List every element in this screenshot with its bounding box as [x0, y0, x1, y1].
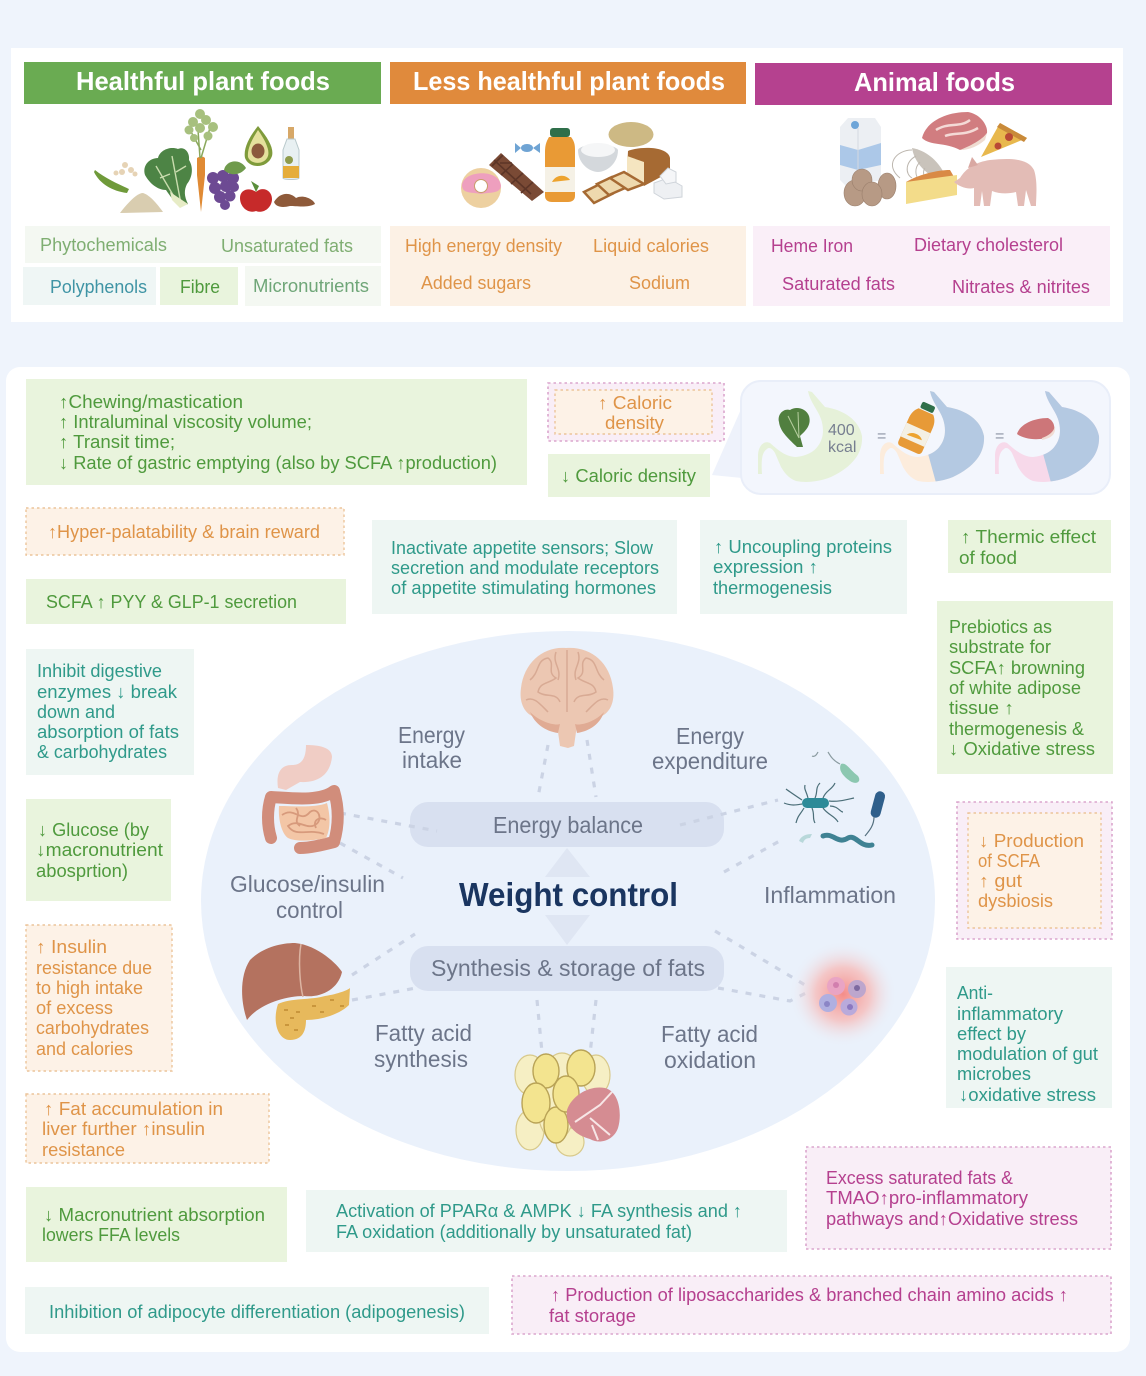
- callout: macronutrient absorption: [26, 1187, 287, 1262]
- icon: brain: [521, 648, 613, 748]
- pill: synthesis and storage of fats: Synthesis & storage of fats: [431, 955, 705, 981]
- callout: prebiotics: of white adipose: [949, 678, 1081, 698]
- text: 400 kcal: 400: [828, 422, 855, 439]
- callout: insulin resistance: to high intake: [36, 978, 143, 998]
- callout: digestive enzymes: [26, 649, 194, 775]
- callout: uncoupling proteins: [700, 520, 907, 614]
- panel: mechanisms background: [6, 367, 1130, 1352]
- label: fatty acid oxidation: Fatty acid: [661, 1021, 758, 1047]
- callout: digestive enzymes: Inhibit digestive: [37, 661, 162, 681]
- panel: food groups: [11, 48, 1123, 322]
- callout: insulin resistance: carbohydrates: [36, 1018, 149, 1038]
- text: equals sign: =: [877, 428, 886, 445]
- callout: SCFA production and gut dysbiosis: ↑ gut: [979, 871, 1022, 891]
- callout: decreased caloric density: ↓ Caloric density: [561, 466, 696, 486]
- callout: glucose: ↓ Glucose (by: [38, 820, 149, 840]
- callout: liposaccharides: ↑ Production of liposaccharides & branched chain amino acids ↑: [551, 1285, 1068, 1305]
- callout: glucose: ↓macronutrient: [36, 840, 163, 860]
- callout: fat accumulation in liver: liver further ↑insulin: [42, 1119, 205, 1139]
- icon: stomach and intestines: [268, 745, 338, 848]
- callout: appetite sensors: secretion and modulate receptors: [391, 558, 659, 578]
- callout: appetite sensors: Inactivate appetite sensors; Slow: [391, 538, 654, 558]
- icon: adipose tissue: [515, 1050, 620, 1156]
- callout: glucose: abosprtion): [36, 861, 128, 881]
- label: energy intake: [398, 722, 465, 773]
- callout: SCFA production and gut dysbiosis: of SCFA: [978, 851, 1040, 871]
- text: 400 kcal: kcal: [828, 439, 856, 456]
- label: energy expenditure: expenditure: [652, 748, 768, 774]
- callout: anti-inflammatory: Anti-: [957, 983, 993, 1003]
- panel: less healthful nutrients: [390, 226, 746, 306]
- callout: prebiotics: substrate for: [949, 637, 1051, 657]
- heading: Animal foods: Animal foods: [854, 67, 1015, 97]
- callout: appetite sensors: of appetite stimulating hormones: [391, 578, 656, 598]
- callout: thermic effect: of food: [959, 548, 1017, 568]
- heading: Less healthful plant foods: [390, 62, 746, 104]
- panel: less healthful nutrients: Added sugars: [421, 273, 531, 293]
- panel: healthful nutrients: Phytochemicals: [40, 235, 167, 255]
- panel: animal nutrients: Dietary cholesterol: [914, 235, 1063, 255]
- label: fatty acid oxidation: oxidation: [664, 1047, 756, 1073]
- callout: hyper-palatability: ↑Hyper-palatability & brain reward: [48, 522, 320, 542]
- callout: saturated fats and TMAO: pathways and↑Oxidative stress: [826, 1209, 1078, 1229]
- callout: anti-inflammatory: [946, 967, 1112, 1108]
- central diagram: weight control: [201, 631, 935, 1171]
- icon: gut bacteria: [784, 752, 886, 845]
- label: energy expenditure: Energy: [676, 723, 744, 749]
- callout: digestive enzymes: absorption of fats: [37, 722, 179, 742]
- text: equals sign: =: [995, 428, 1004, 445]
- callout: saturated fats and TMAO: [806, 1147, 1111, 1249]
- panel: healthful nutrients: Polyphenols: [50, 277, 147, 297]
- label: energy intake: intake: [402, 747, 462, 773]
- callout: thermic effect: [948, 520, 1111, 573]
- callout: fat accumulation in liver: resistance: [42, 1140, 125, 1160]
- label: fatty acid synthesis: [374, 1020, 472, 1072]
- callout: anti-inflammatory: effect by: [957, 1024, 1026, 1044]
- panel: healthful nutrients: Unsaturated fats: [221, 236, 353, 256]
- label: energy intake: Energy: [398, 722, 465, 748]
- callout: chewing, viscosity, transit time, gastric emptying: ↑Chewing/mastication: [59, 392, 243, 412]
- callout: prebiotics: Prebiotics as: [949, 617, 1052, 637]
- callout: digestive enzymes: down and: [37, 702, 115, 722]
- icon: animal foods illustration: [840, 112, 1036, 206]
- callout: SCFA secretion: SCFA ↑ PYY & GLP-1 secretion: [46, 592, 297, 612]
- label: glucose/insulin control: Glucose/insulin: [230, 871, 385, 897]
- callout: insulin resistance: and calories: [36, 1039, 133, 1059]
- callout: prebiotics: tissue ↑: [949, 698, 1014, 718]
- callout: anti-inflammatory: microbes: [957, 1064, 1031, 1084]
- callout: chewing, viscosity, transit time, gastric emptying: [26, 379, 527, 485]
- panel: animal nutrients: Heme Iron: [771, 236, 853, 256]
- callout: digestive enzymes: enzymes ↓ break: [37, 682, 178, 702]
- callout: chewing, viscosity, transit time, gastric emptying: ↓ Rate of gastric emptying (also by SCFA ↑production): [59, 453, 497, 473]
- callout: fat accumulation in liver: ↑ Fat accumulation in: [44, 1099, 223, 1119]
- panel: less healthful nutrients: Liquid calories: [593, 236, 709, 256]
- callout: SCFA secretion: [26, 579, 346, 624]
- callout: saturated fats and TMAO: Excess saturated fats &: [826, 1168, 1013, 1188]
- icon: liver and pancreas: [242, 943, 350, 1040]
- panel: equal calories, stomach comparison: [712, 381, 1110, 494]
- callout: PPAR and AMPK activation: [306, 1190, 787, 1252]
- callout: insulin resistance: [26, 925, 172, 1071]
- callout: thermic effect: ↑ Thermic effect: [961, 527, 1096, 547]
- callout: insulin resistance: of excess: [36, 998, 113, 1018]
- callout: SCFA production and gut dysbiosis: ↓ Production: [979, 831, 1084, 851]
- callout: macronutrient absorption: ↓ Macronutrient absorption: [44, 1205, 265, 1225]
- callout: prebiotics: SCFA↑ browning: [949, 658, 1085, 678]
- callout: anti-inflammatory: ↓oxidative stress: [959, 1085, 1096, 1105]
- panel: animal nutrients: [753, 226, 1110, 306]
- label: fatty acid synthesis: synthesis: [374, 1046, 468, 1072]
- callout: insulin resistance: resistance due: [36, 958, 152, 978]
- callout: SCFA production and gut dysbiosis: [957, 802, 1112, 939]
- label: glucose/insulin control: [230, 871, 385, 923]
- icon: less healthful plant foods illustration: [461, 122, 682, 208]
- callout: fat accumulation in liver: [26, 1094, 269, 1163]
- arrow: down triangle: [545, 915, 590, 945]
- callout: hyper-palatability: [26, 508, 344, 555]
- panel: healthful nutrients: [23, 226, 381, 306]
- callout: prebiotics: [937, 601, 1113, 774]
- callout: decreased caloric density: [548, 454, 710, 497]
- callout: SCFA production and gut dysbiosis: dysbiosis: [978, 891, 1053, 911]
- callout: digestive enzymes: & carbohydrates: [37, 742, 167, 762]
- icon: inflammation cells: [789, 941, 897, 1047]
- heading: Healthful plant foods: Healthful plant foods: [76, 66, 330, 96]
- callout: adipogenesis: [25, 1287, 489, 1334]
- icon: healthful plant foods illustration: [94, 109, 315, 213]
- title: weight control: Weight control: [459, 876, 678, 913]
- callout: liposaccharides: fat storage: [549, 1306, 636, 1326]
- heading: Healthful plant foods: [24, 62, 381, 104]
- heading: Less healthful plant foods: Less healthful plant foods: [413, 66, 725, 96]
- callout: increased caloric density: density: [605, 413, 664, 433]
- callout: insulin resistance: ↑ Insulin: [36, 937, 107, 957]
- callout: uncoupling proteins: thermogenesis: [713, 578, 832, 598]
- callout: chewing, viscosity, transit time, gastric emptying: ↑ Transit time;: [59, 432, 175, 452]
- callout: anti-inflammatory: inflammatory: [957, 1004, 1063, 1024]
- callout: chewing, viscosity, transit time, gastric emptying: ↑ Intraluminal viscosity volume;: [59, 412, 312, 432]
- callout: macronutrient absorption: lowers FFA levels: [42, 1225, 180, 1245]
- callout: PPAR and AMPK activation: Activation of PPARα & AMPK ↓ FA synthesis and ↑: [336, 1201, 742, 1221]
- callout: PPAR and AMPK activation: FA oxidation (additionally by unsaturated fat): [336, 1222, 692, 1242]
- icon: stomach with juice: [880, 391, 984, 482]
- callout: glucose: [26, 799, 171, 901]
- callout: increased caloric density: [548, 383, 724, 441]
- pill: synthesis and storage of fats: [410, 946, 724, 991]
- panel: less healthful nutrients: Sodium: [629, 273, 690, 293]
- callout: prebiotics: thermogenesis &: [949, 719, 1084, 739]
- callout: anti-inflammatory: modulation of gut: [957, 1044, 1098, 1064]
- callout: uncoupling proteins: expression ↑: [713, 557, 818, 577]
- label: fatty acid synthesis: Fatty acid: [375, 1020, 472, 1046]
- label: glucose/insulin control: control: [276, 897, 343, 923]
- callout: saturated fats and TMAO: TMAO↑pro-inflammatory: [826, 1188, 1028, 1208]
- arrow: up triangle: [545, 848, 590, 877]
- panel: healthful nutrients: Fibre: [180, 277, 220, 297]
- icon: stomach with meat: [995, 391, 1099, 482]
- icon: stomach with vegetables: [758, 391, 862, 482]
- label: energy expenditure: [652, 723, 768, 774]
- callout: adipogenesis: Inhibition of adipocyte differentiation (adipogenesis): [49, 1302, 465, 1322]
- callout: increased caloric density: ↑ Caloric: [598, 393, 672, 413]
- callout: prebiotics: ↓ Oxidative stress: [949, 739, 1095, 759]
- panel: animal nutrients: Saturated fats: [782, 274, 895, 294]
- callout: uncoupling proteins: ↑ Uncoupling proteins: [714, 537, 892, 557]
- panel: healthful nutrients: Micronutrients: [253, 276, 369, 296]
- label: fatty acid oxidation: [661, 1021, 758, 1073]
- callout: liposaccharides: [512, 1276, 1111, 1334]
- panel: animal nutrients: Nitrates & nitrites: [952, 277, 1090, 297]
- pill: energy balance: Energy balance: [493, 812, 643, 838]
- heading: Animal foods: [755, 63, 1112, 105]
- label: inflammation: Inflammation: [764, 882, 896, 908]
- panel: less healthful nutrients: High energy density: [405, 236, 562, 256]
- callout: appetite sensors: [372, 520, 677, 614]
- pill: energy balance: [410, 802, 724, 847]
